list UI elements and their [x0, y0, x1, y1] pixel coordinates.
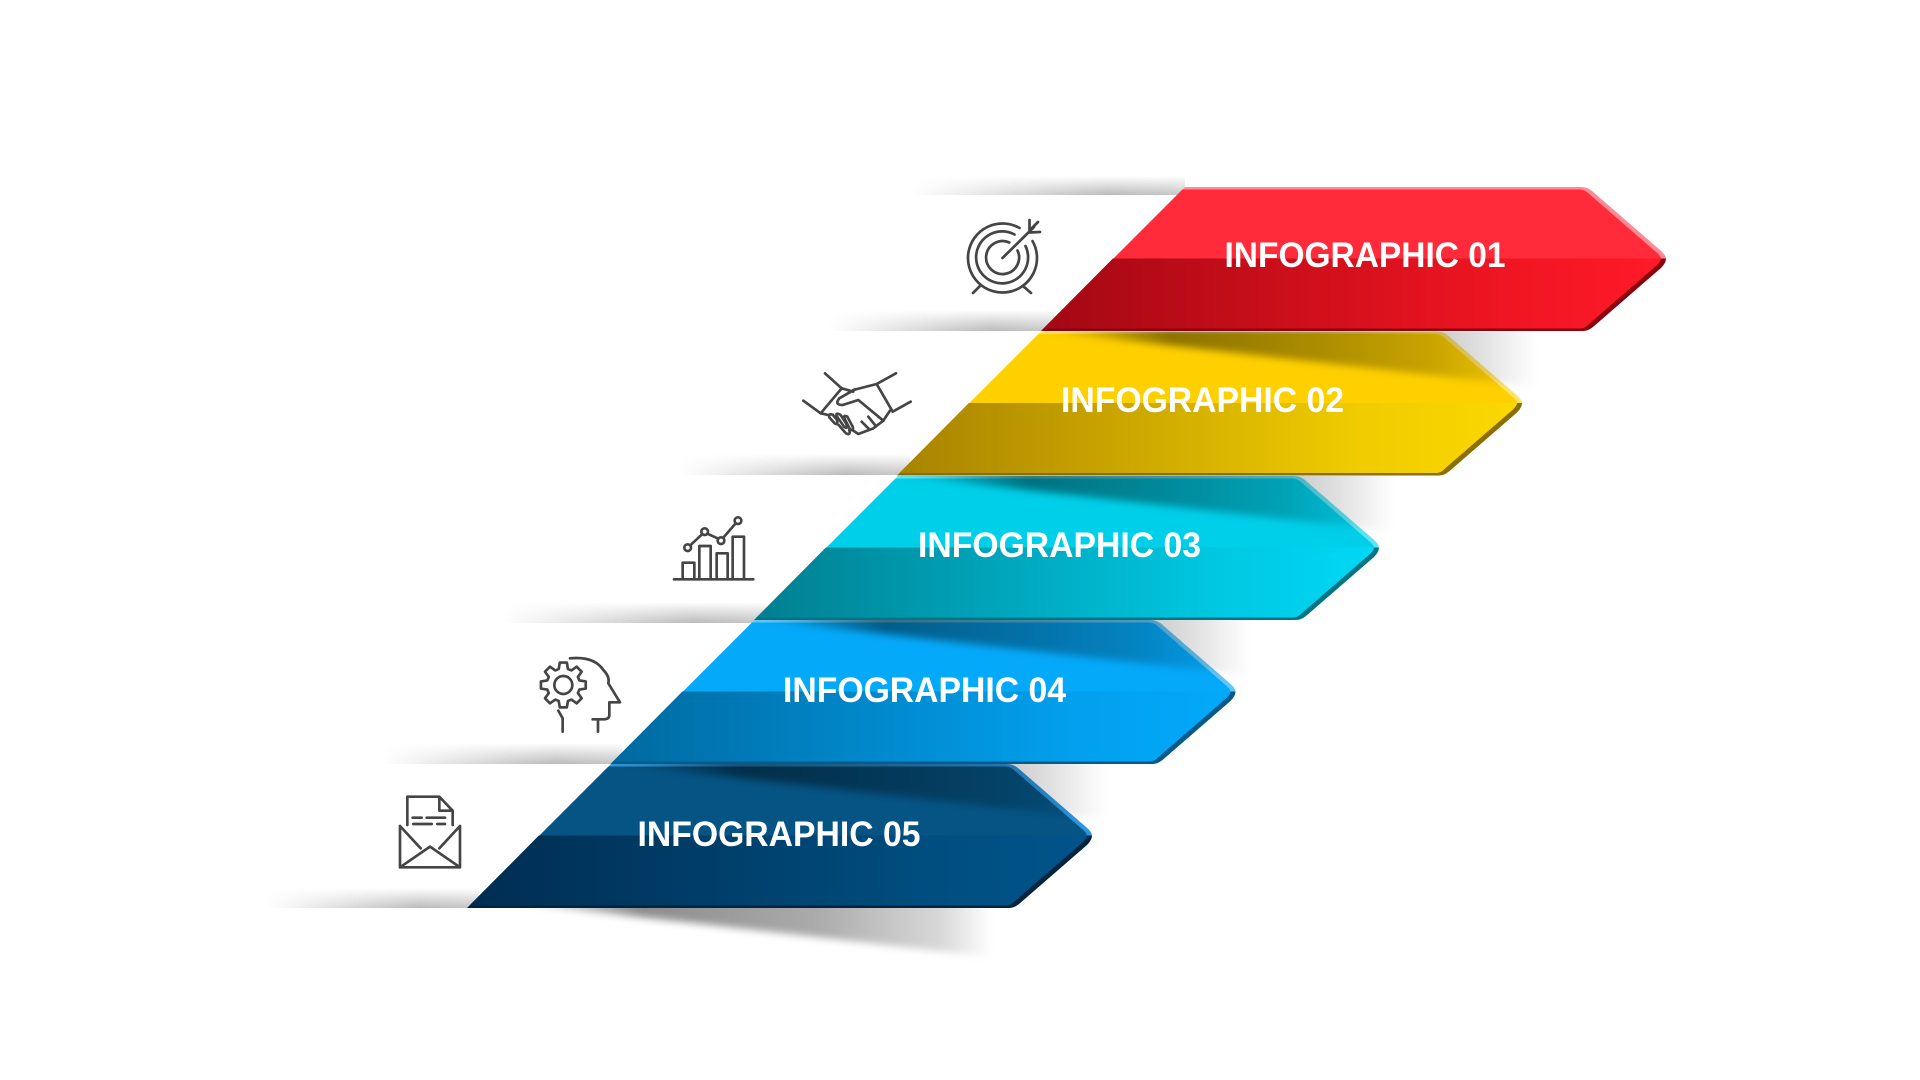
heading: infographic 03: INFOGRAPHIC 03 [918, 526, 1201, 565]
panel: row 1 arrow [1041, 187, 1666, 331]
shadow under row 5 [538, 908, 981, 955]
icon: envelope with letter [400, 797, 460, 867]
band shadows behind the rows [267, 176, 1185, 908]
icon: target with arrow [968, 220, 1040, 293]
panel: row 2 arrow [897, 322, 1541, 476]
heading: infographic 05: INFOGRAPHIC 05 [638, 815, 920, 854]
heading: infographic 02: INFOGRAPHIC 02 [1061, 381, 1344, 420]
panel: row 3 arrow [754, 466, 1398, 620]
heading: infographic 01: INFOGRAPHIC 01 [1224, 236, 1506, 275]
panel: row 4 arrow [610, 610, 1254, 764]
heading: infographic 04: INFOGRAPHIC 04 [783, 671, 1067, 710]
icon: bar chart with trend line [674, 517, 753, 579]
icon: handshake [803, 373, 911, 434]
icon: head with gear [541, 658, 620, 732]
panel: row 5 arrow [467, 754, 1111, 908]
